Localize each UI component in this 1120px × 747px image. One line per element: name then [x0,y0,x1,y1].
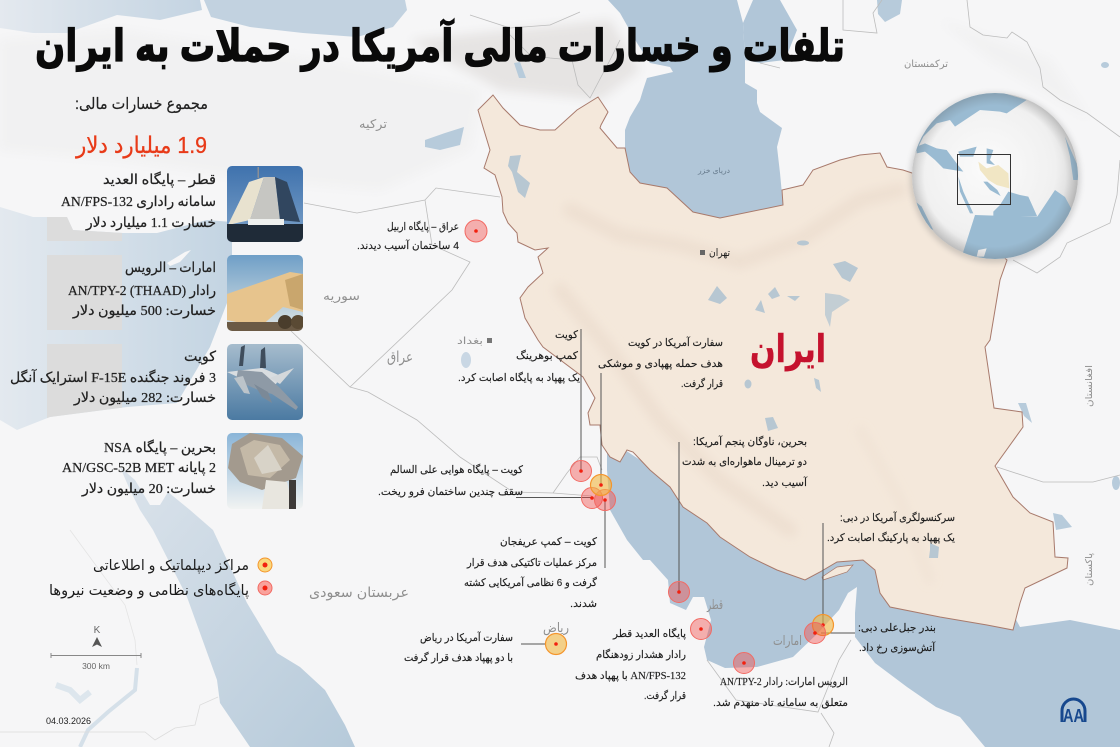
annotation: Arifjan: کویت – کمپ عریفجان [500,536,597,548]
annotation: Al Udeid [575,627,686,702]
markers [465,220,834,674]
text: Kuwait: 3 فروند جنگنده F-15E استرایک آنگل [10,369,216,386]
city: Tehran: تهران [709,247,730,259]
marker: Arifjan [594,490,616,510]
subtle terrain [0,20,1090,190]
text: Bahrain [62,439,216,497]
marker: Ali Al Salem [582,488,602,508]
annotation: Dubai consulate: سرکنسولگری آمریکا در دبی: [840,511,955,524]
marker: Camp Buehring [570,460,592,482]
annotation: Al Udeid: AN/FPS-132 با پهپاد هدف [575,671,686,682]
annotation: US embassy Kuwait: هدف حمله پهپادی و موشکی [598,358,723,370]
photo: THAAD radar [227,255,305,331]
annotation: Al Ruwais [713,677,848,709]
text: Qatar: سامانه راداری AN/FPS-132 [61,195,216,210]
country labels: ترکیه [359,117,387,132]
marker: Al Ruwais [734,652,754,674]
lake Nasser [80,668,137,747]
text: Bahrain: بحرین – پایگاه NSA [104,439,216,456]
marker: Erbil [465,220,487,242]
logo: AA: AA [1063,706,1084,726]
annotation: Erbil: عراق – پایگاه اربیل [387,220,459,233]
annotation: Bahrain fifth fleet: بحرین، ناوگان پنجم آمریکا: [693,435,807,448]
marker: Al Udeid [690,618,712,640]
logo: AA [1062,699,1085,726]
heading: total loss: مجموع خسارات مالی: [75,96,208,114]
date: 04.03.2026 [46,716,91,726]
value: 1.9 billion dollars: 1.9 میلیارد دلار [75,132,207,159]
annotation: Riyadh embassy [404,631,513,664]
text: UAE: امارات – الرویس [125,261,216,276]
label: Iran: ایران [750,329,826,371]
country labels: عربستان سعودی [309,584,409,601]
city: Tehran [700,247,730,259]
country labels: دریای خزر [697,166,730,175]
text: Kuwait: کویت [184,350,216,365]
text: UAE [68,261,216,319]
text: UAE: رادار (THAAD) AN/TPY-2 [68,284,216,299]
annotation: US embassy Kuwait [598,336,723,390]
annotation: Bahrain fifth fleet [682,435,808,489]
annotation: Camp Buehring: کویت [555,329,578,341]
panel: Kuwait F-15E loss [10,344,303,420]
annotation: Arifjan: گرفت و 6 نظامی آمریکایی کشته [464,576,597,589]
annotation: Erbil [357,220,459,252]
country labels: عراق [387,349,413,366]
text: Kuwait [10,350,216,406]
photo: radar building [227,166,303,242]
Qeshm island [822,565,853,580]
country labels: امارات [773,633,802,649]
annotation: Al Udeid: پایگاه العدید قطر [612,627,686,640]
country labels: قطر [706,597,723,613]
annotation: Camp Buehring [458,329,580,384]
annotation: Al Udeid: رادار هشدار زودهنگام [596,648,686,661]
annotation: Camp Buehring: کمپ بوهرینگ [516,349,578,362]
annotation: Al Udeid: قرار گرفت. [644,689,686,702]
marker: Dubai consulate [812,614,834,636]
annotation: US embassy Kuwait: سفارت آمریکا در کویت [628,336,723,349]
annotation: Jebel Ali: بندر جبل‌علی دبی: [858,622,936,634]
country labels: ترکمنستان [904,59,948,70]
annotation: Arifjan [464,536,597,610]
annotation: Riyadh embassy: با دو پهپاد هدف قرار گرفت [404,651,513,664]
country labels: افغانستان [1084,365,1095,407]
annotation: Ali Al Salem: کویت – پایگاه هوایی علی السالم [390,463,523,476]
text: UAE: خسارت: 500 میلیون دلار [72,304,216,319]
panel: Qatar Al Udeid loss [61,166,303,242]
sea: Mediterranean [0,207,232,430]
sea: Red Sea [120,467,355,747]
annotation: Dubai consulate: یک پهپاد به پارکینگ اصابت کرد. [827,531,955,544]
annotation: Al Ruwais: الرویس امارات: رادار AN/TPY-2 [720,677,848,688]
text: Qatar: قطر – پایگاه العدید [103,171,216,188]
legend [49,558,272,599]
annotation: Jebel Ali: آتش‌سوزی رخ داد. [859,641,936,654]
annotation: Camp Buehring: یک پهپاد به پایگاه اصابت کرد. [458,371,580,384]
photo: satellite dish [227,433,303,509]
annotation: Al Ruwais: متعلق به سامانه تاد منهدم شد. [713,697,848,709]
legend: diplomatic: مراکز دیپلماتیک و اطلاعاتی [93,558,249,574]
annotation: Ali Al Salem: سقف چندین ساختمان فرو ریخت. [378,486,523,498]
text: Bahrain: خسارت: 20 میلیون دلار [81,482,216,497]
panel: total financial loss [75,96,208,159]
annotation: Ali Al Salem [378,463,523,498]
annotation: Dubai consulate [827,511,955,544]
text: Bahrain: 2 پایانه AN/GSC-52B MET [62,461,216,476]
lakes outside Iran [425,0,1120,530]
title: تلفات و خسارات مالی آمریکا در حملات به ایران [35,18,845,72]
annotation: Bahrain fifth fleet: دو ترمینال ماهواره‌ای به شدت [682,456,807,468]
compass and scale bar [51,625,141,671]
text: Qatar [61,171,216,231]
grey text plates [47,217,122,418]
marker: Bahrain [668,582,690,602]
leader lines [516,329,855,644]
country labels: بغداد [457,336,483,347]
annotation: US embassy Kuwait: قرار گرفت. [681,377,723,390]
map: Iran [478,95,1068,630]
country labels: پاکستان [1084,553,1095,586]
annotation: Riyadh embassy: سفارت آمریکا در ریاض [420,631,513,644]
terrain ridges [560,190,930,580]
marker: US embassy Kuwait [590,474,612,496]
panel: Bahrain NSA loss [62,433,303,509]
sea: Black Sea [0,0,202,33]
compass and scale bar: 300 km [82,661,110,671]
panel: UAE Al Ruwais loss [68,255,305,331]
annotation: Arifjan: شدند. [570,598,597,610]
globe locator [910,90,1085,263]
compass and scale bar: K [94,625,101,636]
country labels: ریاض [543,620,569,636]
marker: Jebel Ali [804,622,826,644]
annotation: Arifjan: مرکز عملیات تاکتیکی هدف قرار [466,557,597,569]
annotation: Bahrain fifth fleet: آسیب دید. [762,476,808,489]
lakes in Iran [508,155,939,558]
annotation: Jebel Ali [858,622,936,654]
sea: Caspian [608,0,783,218]
marker: Riyadh embassy [546,634,566,654]
text: Qatar: خسارت 1.1 میلیارد دلار [85,216,216,231]
legend: military: پایگاه‌های نظامی و وضعیت نیروها [49,582,249,599]
text: Kuwait: خسارت: 282 میلیون دلار [73,391,216,406]
annotation: Erbil: 4 ساختمان آسیب دیدند. [357,239,459,252]
country labels: سوریه [323,289,360,304]
photo: fighter jet [227,344,303,420]
sea: Persian Gulf and Gulf of Oman [607,440,1120,747]
country labels [309,59,1095,649]
